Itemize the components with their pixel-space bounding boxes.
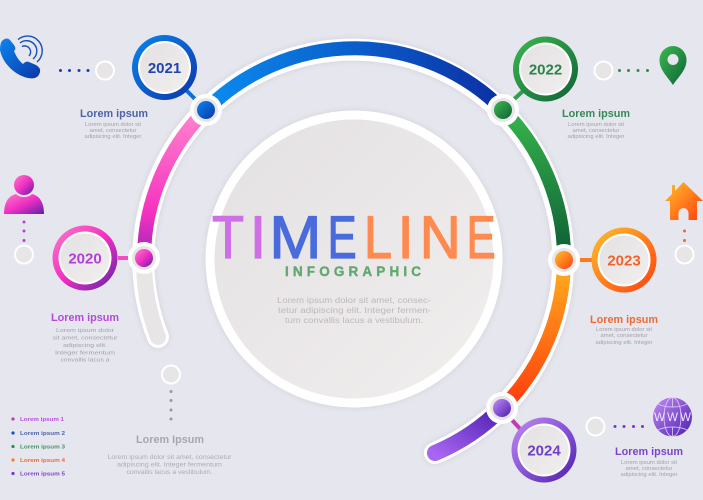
text block: 2020: adipiscing elit. xyxy=(63,343,107,349)
icon: person xyxy=(4,175,44,214)
central body text xyxy=(277,295,431,325)
icon: location pin xyxy=(660,46,686,85)
arc segment: pink xyxy=(144,110,206,258)
node: 2024 xyxy=(486,392,522,431)
year badge: 2021: 2021 xyxy=(148,60,181,77)
title: TIMELINE: M xyxy=(269,204,321,271)
text block: 2023: Lorem ipsum dolor sit xyxy=(596,327,652,333)
icon: house xyxy=(665,182,703,220)
icon: globe: W xyxy=(654,412,665,424)
legend: Lorem ipsum 4 xyxy=(20,458,66,464)
text block: 2022 xyxy=(562,108,630,140)
icon: globe: W xyxy=(680,412,691,424)
title: TIMELINE xyxy=(212,204,496,271)
year badge: 2021 xyxy=(132,35,197,100)
node: 2023 xyxy=(548,244,593,276)
text block: 2021 xyxy=(80,108,148,140)
legend: Lorem ipsum 3 xyxy=(20,444,66,450)
text block: 2021: amet, consectetur xyxy=(90,128,137,134)
title: TIMELINE: L xyxy=(364,204,392,271)
text block: 2022: amet, consectetur xyxy=(572,128,620,134)
connector: bottom grey dots xyxy=(161,364,181,420)
title: TIMELINE: T xyxy=(212,204,244,271)
text block: 2020: sit amet, consectetur xyxy=(52,336,118,342)
text block: 2021: Lorem ipsum xyxy=(80,108,148,120)
legend xyxy=(11,417,66,478)
text block: 2024: amet, consectetur xyxy=(626,466,673,472)
connector: pin dots xyxy=(594,60,649,80)
text block: 2020: Integer fermentum xyxy=(55,350,115,356)
arc segment: orange xyxy=(503,259,564,407)
year badge: 2020 xyxy=(52,226,118,290)
text block: 2020 xyxy=(51,312,119,364)
text block: 2021: Lorem ipsum dolor sit xyxy=(85,122,141,128)
text block: 2020: Lorem ipsum xyxy=(51,312,119,324)
central body text: tum convallis lacus a vestibulum. xyxy=(285,315,423,325)
text block: 2023: amet, consectetur xyxy=(600,333,648,339)
text block: 2020: convallis lacus a xyxy=(60,358,110,364)
text block: 2024 xyxy=(615,446,683,478)
arc segment: grey tail xyxy=(144,258,158,337)
icon: globe xyxy=(653,398,692,436)
year badge: 2024 xyxy=(512,418,576,482)
legend: Lorem ipsum 5 xyxy=(20,472,66,478)
subtitle: INFOGRAPHIC: INFOGRAPHIC xyxy=(285,264,421,279)
text block: 2020: Lorem ipsum dolor xyxy=(56,328,114,334)
central body text: tetur adipiscing elit. Integer fermen- xyxy=(278,305,431,315)
text block: Lorem Ipsum grey xyxy=(108,434,232,476)
title: TIMELINE: N xyxy=(420,204,461,271)
arc white outline xyxy=(143,50,563,453)
title: TIMELINE: I xyxy=(398,204,414,271)
title: TIMELINE: I xyxy=(250,204,266,271)
text block: 2022: Lorem ipsum dolor sit xyxy=(568,122,624,128)
text block: 2024: Lorem ipsum dolor sit xyxy=(621,460,677,466)
text block: 2024: Lorem ipsum xyxy=(615,446,683,458)
arc segment: blue xyxy=(206,48,503,110)
legend: Lorem ipsum 2 xyxy=(20,431,65,437)
arc segment: green xyxy=(503,110,564,259)
text block: 2022: adipiscing elit. Integer xyxy=(568,134,625,140)
year badge: 2022: 2022 xyxy=(529,62,562,78)
text block: 2024: adipiscing elit. Integer xyxy=(620,472,678,478)
year badge: 2023 xyxy=(592,228,656,292)
connector: globe dots xyxy=(586,416,644,436)
arc segment: purple tail xyxy=(435,407,503,453)
connector: house dots xyxy=(674,230,694,264)
text block: 2023 xyxy=(590,314,658,346)
node: 2022 xyxy=(487,91,523,126)
text block: Lorem Ipsum grey: convallis lacus a vestibulum. xyxy=(126,469,213,476)
legend: Lorem ipsum 1 xyxy=(20,417,65,423)
icon: globe: W xyxy=(667,412,678,424)
node: 2020 xyxy=(118,242,160,274)
central circle xyxy=(206,110,502,408)
text block: 2023: adipiscing elit. Integer xyxy=(596,340,653,346)
connector: person dots xyxy=(14,220,34,264)
year badge: 2022 xyxy=(513,36,578,102)
text block: 2023: Lorem ipsum xyxy=(590,314,658,326)
text block: Lorem Ipsum grey: adipiscing elit. Integer fermentum xyxy=(117,462,223,468)
central body text: Lorem ipsum dolor sit amet, consec- xyxy=(277,295,431,305)
connector: phone dots xyxy=(59,60,115,80)
text block: Lorem Ipsum grey: Lorem Ipsum xyxy=(136,434,204,446)
timeline arc xyxy=(143,48,564,453)
text block: 2022: Lorem ipsum xyxy=(562,108,630,120)
text block: 2021: adipiscing elit. Integer xyxy=(84,134,142,140)
year badge: 2020: 2020 xyxy=(68,250,102,268)
node: 2021 xyxy=(186,90,222,126)
text block: Lorem Ipsum grey: Lorem ipsum dolor sit amet, consectetur xyxy=(108,454,232,461)
year badge: 2023: 2023 xyxy=(607,252,641,270)
title: TIMELINE: E xyxy=(328,204,357,271)
icon: phone xyxy=(0,36,42,78)
year badge: 2024: 2024 xyxy=(527,442,561,460)
title: TIMELINE: E xyxy=(467,204,496,271)
